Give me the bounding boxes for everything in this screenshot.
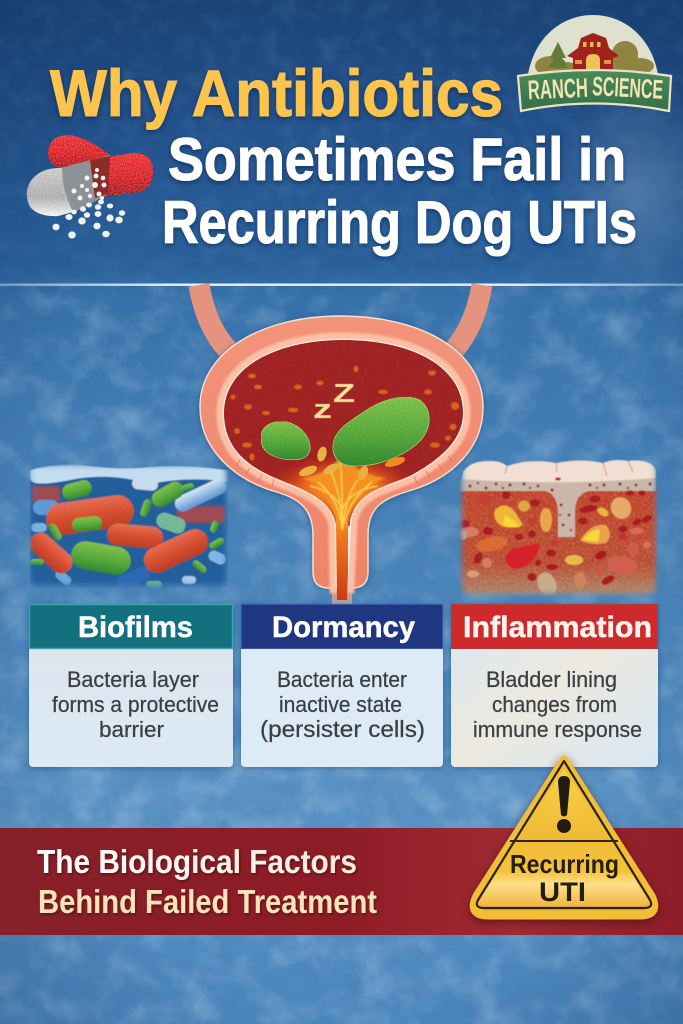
triangle body [474, 760, 654, 915]
card body [241, 604, 443, 767]
card: Inflammation [451, 604, 658, 767]
card description: Bacteria layer [67, 667, 199, 692]
banner text: The Biological Factors [37, 843, 357, 880]
card description: changes from [492, 692, 617, 717]
spilled powder [52, 200, 125, 239]
logo banner [518, 70, 671, 111]
logo barn [567, 33, 619, 70]
foam band and crypt [460, 478, 656, 537]
biofilm red bacteria [25, 493, 212, 578]
bladder cavity [220, 336, 468, 602]
title line 2: Sometimes Fail in [168, 126, 626, 193]
red banner [0, 828, 683, 935]
card heading: Inflammation [463, 611, 652, 644]
card: Biofilms [29, 604, 233, 767]
divider line [0, 284, 683, 286]
card description [52, 667, 219, 742]
capsule red half [90, 153, 153, 198]
title [50, 56, 637, 256]
orange flecks [230, 366, 459, 461]
left ureter [199, 285, 228, 350]
banner text [37, 843, 377, 920]
card description: inactive state [279, 692, 402, 717]
seed-shaped cells [298, 446, 406, 482]
triangle label: Recurring [510, 849, 619, 879]
bladder illustration [199, 285, 483, 604]
card description: immune response [473, 717, 642, 742]
card heading: Dormancy [272, 611, 415, 644]
card description [260, 667, 425, 742]
right ureter [454, 285, 482, 350]
urethra tube [332, 585, 352, 604]
urine streams [302, 460, 386, 528]
exclamation mark [557, 776, 571, 833]
cavity edge highlight [224, 340, 463, 586]
lining creases [505, 461, 633, 476]
bladder inner ring [224, 340, 463, 586]
triangle divider [510, 840, 618, 842]
biofilm green bacteria [30, 478, 225, 588]
triangle label [510, 849, 619, 907]
biofilm red haze [32, 486, 225, 523]
large dormant bacterium [333, 397, 429, 466]
card header [30, 604, 232, 648]
urethra channel [336, 518, 348, 600]
logo trees [535, 41, 654, 76]
card: Dormancy [241, 604, 443, 767]
triangle inner outline [477, 761, 651, 908]
capsule clear middle [60, 155, 110, 213]
card body [29, 604, 233, 767]
card description: (persister cells) [260, 716, 425, 742]
warning triangle: Recurring UTI [474, 760, 654, 915]
card heading: Biofilms [78, 611, 193, 644]
sleep letters: z [313, 394, 332, 424]
red cells [459, 490, 653, 588]
card header [452, 604, 658, 648]
capsule dark-red overlay [90, 156, 110, 198]
icon: broken antibiotic capsule [27, 135, 153, 239]
biofilm blue rods [31, 476, 230, 592]
bladder wall [200, 316, 483, 588]
sleep letters: Z [333, 378, 355, 408]
card description: forms a protective [52, 692, 219, 717]
small dormant bacterium [261, 422, 310, 460]
sleep letters [313, 378, 355, 424]
card header [242, 604, 442, 648]
biofilm top layer [30, 465, 228, 484]
banner text: Behind Failed Treatment [38, 883, 377, 920]
logo: Ranch Science [518, 15, 671, 111]
card body [451, 604, 658, 767]
capsule white half [27, 168, 73, 216]
card description: Bladder lining [486, 667, 617, 692]
card description: Bacteria enter [277, 667, 407, 692]
wall tick marks [236, 456, 453, 486]
yellow cells [475, 494, 638, 599]
capsule back half [48, 135, 110, 170]
inflammation illustration [458, 460, 658, 599]
title line 1: Why Antibiotics [50, 56, 503, 130]
logo banner: RANCH [527, 73, 588, 105]
banner band [0, 828, 683, 935]
lining with bumps [461, 459, 656, 483]
card description [473, 667, 642, 742]
biofilm illustration [25, 465, 230, 592]
triangle label: UTI [539, 877, 586, 907]
urine glow [276, 458, 408, 521]
card description: barrier [99, 717, 164, 742]
logo dome [527, 15, 659, 82]
powder in capsule [72, 168, 106, 200]
